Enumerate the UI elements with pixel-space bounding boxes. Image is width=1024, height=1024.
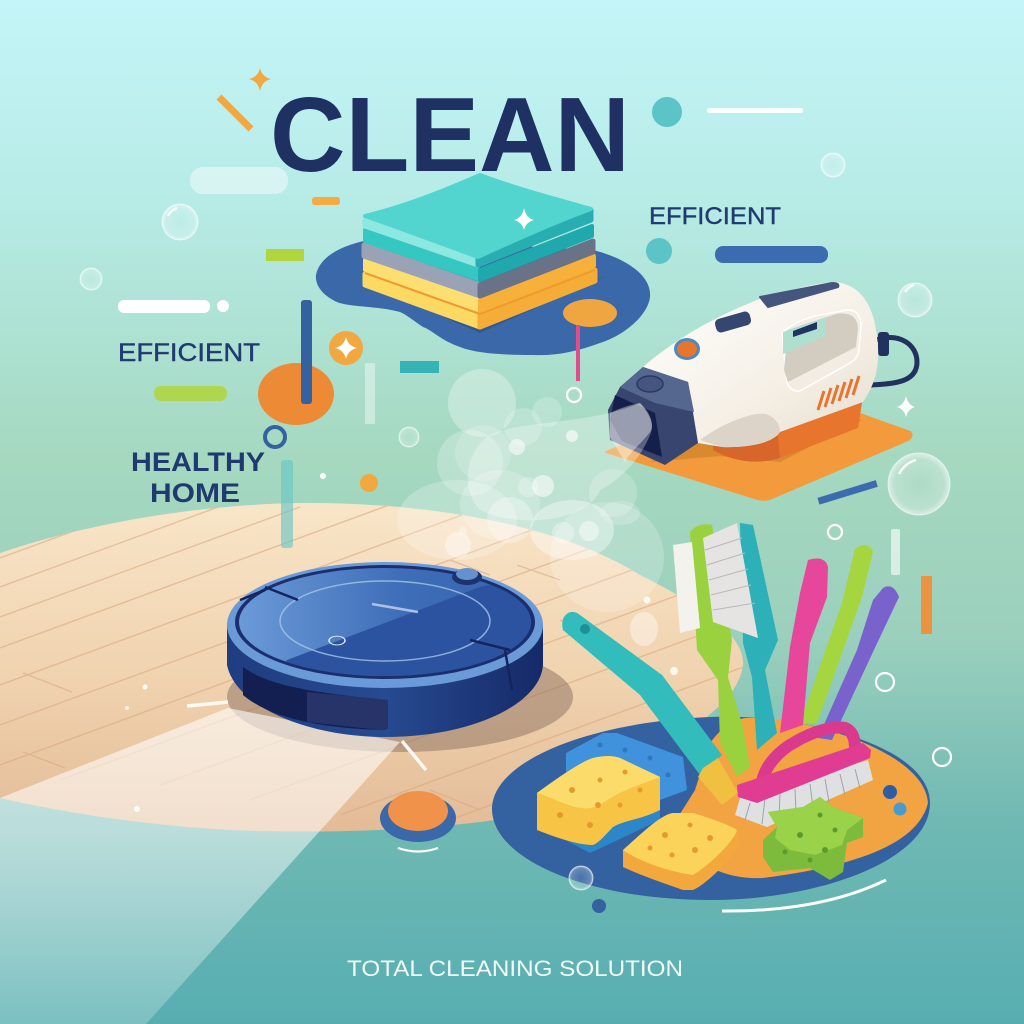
bristles back: [673, 542, 700, 633]
orange base: [713, 396, 863, 462]
side wall: [227, 625, 543, 737]
inner circle: [280, 581, 490, 661]
wooden floor: [0, 503, 744, 832]
pink handle: [780, 559, 828, 733]
lime brush: [800, 545, 873, 723]
blue mat: [316, 238, 650, 355]
sponge pores: [557, 770, 713, 858]
star sponge pores: [782, 812, 838, 862]
vacuum button: [714, 310, 752, 334]
tray dots: [883, 785, 906, 816]
tray orange: [670, 718, 928, 878]
green star sponge: [763, 797, 863, 880]
label: efficient top right: EFFICIENT: [649, 203, 781, 230]
footer caption: TOTAL CLEANING SOLUTION: [347, 956, 683, 981]
blue sponge pores: [598, 742, 670, 778]
teal top layer: [365, 220, 478, 265]
cord: [870, 338, 917, 385]
bubbles: [80, 153, 950, 515]
side window: [243, 667, 388, 730]
dark ring: [235, 565, 535, 679]
yellow sponge base: [537, 805, 660, 853]
tray: [492, 717, 930, 900]
grey layer: [364, 245, 480, 296]
purple brush: [818, 586, 899, 740]
yellow layer bottom: [365, 274, 480, 327]
yellow layer upper: [365, 260, 480, 311]
rim: [227, 562, 543, 688]
vacuum top panel: [760, 283, 838, 307]
tray bubble: [569, 866, 593, 890]
decorative accents: [118, 68, 951, 913]
teal layer lower: [365, 230, 480, 280]
top surface: [239, 568, 531, 676]
pink brush base: [737, 743, 871, 803]
light beam: [0, 708, 400, 1024]
label: healthy home: [131, 447, 265, 508]
power button: [674, 338, 700, 360]
blue sponge: [566, 733, 687, 800]
long teal brush: [562, 612, 722, 775]
orange mat: [606, 414, 912, 500]
yellow sponge right: [623, 813, 740, 890]
teal toothbrush: [740, 523, 778, 750]
logo mark: [372, 604, 418, 612]
rim notches: [240, 587, 512, 690]
brush tip: [698, 758, 738, 805]
label: efficient left: EFFICIENT: [118, 339, 260, 367]
side brushes: [187, 702, 426, 770]
bristles front: [703, 523, 758, 638]
label: healthy home: HOME: [150, 478, 240, 508]
orange dot icon: [380, 791, 456, 852]
robot shadow: [227, 642, 573, 752]
body lower shadow lobe: [700, 414, 780, 447]
white body: [643, 282, 878, 447]
sparkle: [514, 208, 534, 230]
green toothbrush: [690, 524, 750, 777]
cleaning tools tray: [492, 523, 930, 900]
robot vacuum: [187, 562, 560, 770]
star sponge top: [768, 797, 863, 855]
label: healthy home: HEALTHY: [131, 447, 265, 477]
handle opening: [782, 310, 861, 391]
title: CLEAN: [270, 76, 630, 194]
folded cloths: [316, 175, 650, 381]
nozzle: [608, 367, 698, 465]
pink scrub brush bristles: [735, 760, 873, 827]
steam cloud: [397, 369, 678, 675]
pink brush handle: [762, 728, 855, 782]
robot sensor: [452, 569, 482, 585]
yellow sponge left: [537, 756, 660, 845]
vents: [818, 376, 859, 410]
handheld vacuum: [606, 282, 917, 500]
